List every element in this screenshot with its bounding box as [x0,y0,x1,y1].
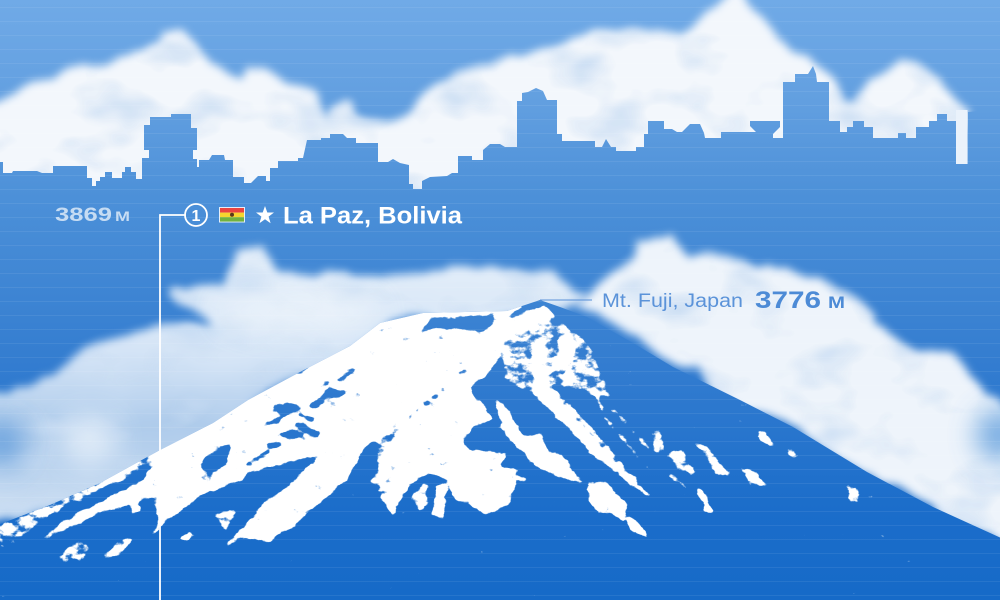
altitude 3869 m label [55,204,130,226]
leader line for Mt. Fuji [540,299,592,301]
connector line to La Paz [160,215,186,600]
city skyline silhouette [0,66,956,205]
ridge strip [0,454,153,547]
Mt. Fuji label: Mt. Fuji, Japan [602,291,743,312]
main snowfield [40,300,557,550]
altitude 3869 m label: M [115,208,130,224]
city label: La Paz, Bolivia [283,202,463,230]
rock holes [130,301,553,480]
white pillar of skyline gap [956,110,968,164]
mid-level clouds left [0,245,590,530]
mountain snow cap [0,306,910,597]
eastern ice streaks [58,320,860,567]
Mt. Fuji label: M [828,293,845,312]
rank badge: 1 [192,208,201,225]
altitude 3869 m label: 3869 [55,204,112,226]
clouds behind city skyline [0,0,962,195]
clouds right of mountain [575,230,1000,560]
Mt. Fuji mountain body [0,300,1000,600]
Mt. Fuji label [602,287,845,314]
rank badge [185,204,207,226]
Mt. Fuji label: 3776 [755,287,821,314]
icon: capital star [256,206,274,223]
icon: Bolivia flag [219,207,245,222]
